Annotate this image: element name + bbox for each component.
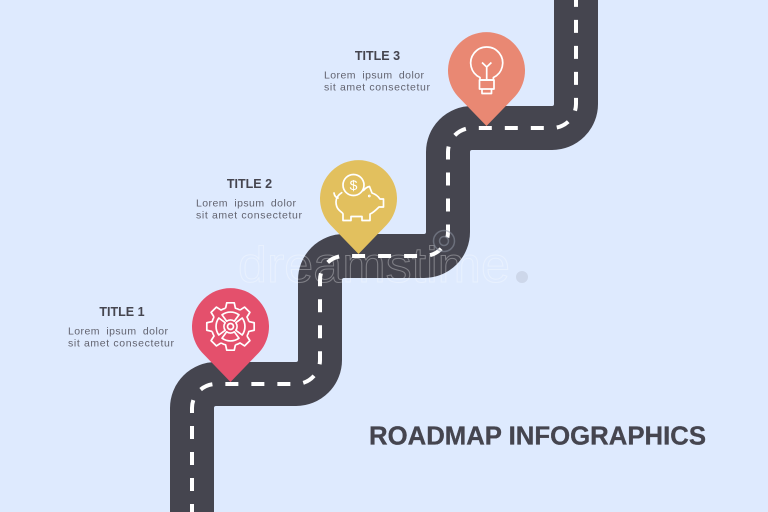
icon: light bulb	[471, 47, 503, 94]
text block: title 3: sit amet consectetur	[324, 82, 430, 94]
text block: title 1: sit amet consectetur	[68, 338, 174, 350]
pin 3: light bulb	[448, 32, 525, 126]
text block: title 1: TITLE 1	[99, 305, 145, 319]
text block: title 3	[324, 49, 430, 94]
icon: piggy bank: $	[350, 177, 358, 193]
text block: title 2: TITLE 2	[227, 177, 272, 191]
main heading: ROADMAP INFOGRAPHICS	[369, 422, 706, 450]
text block: title 2	[196, 177, 302, 222]
watermark: dreamstime	[238, 237, 510, 293]
text block: title 2: sit amet consectetur	[196, 210, 302, 222]
text block: title 1: Lorem ipsum dolor	[68, 326, 168, 338]
pin 1: gear	[192, 288, 269, 382]
pin 2: piggy bank	[320, 160, 397, 254]
text block: title 3: Lorem ipsum dolor	[324, 70, 424, 82]
text block: title 3: TITLE 3	[355, 49, 400, 63]
text block: title 1	[68, 305, 174, 350]
winding road	[192, 0, 576, 512]
icon: gear	[207, 303, 254, 350]
text block: title 2: Lorem ipsum dolor	[196, 198, 296, 210]
